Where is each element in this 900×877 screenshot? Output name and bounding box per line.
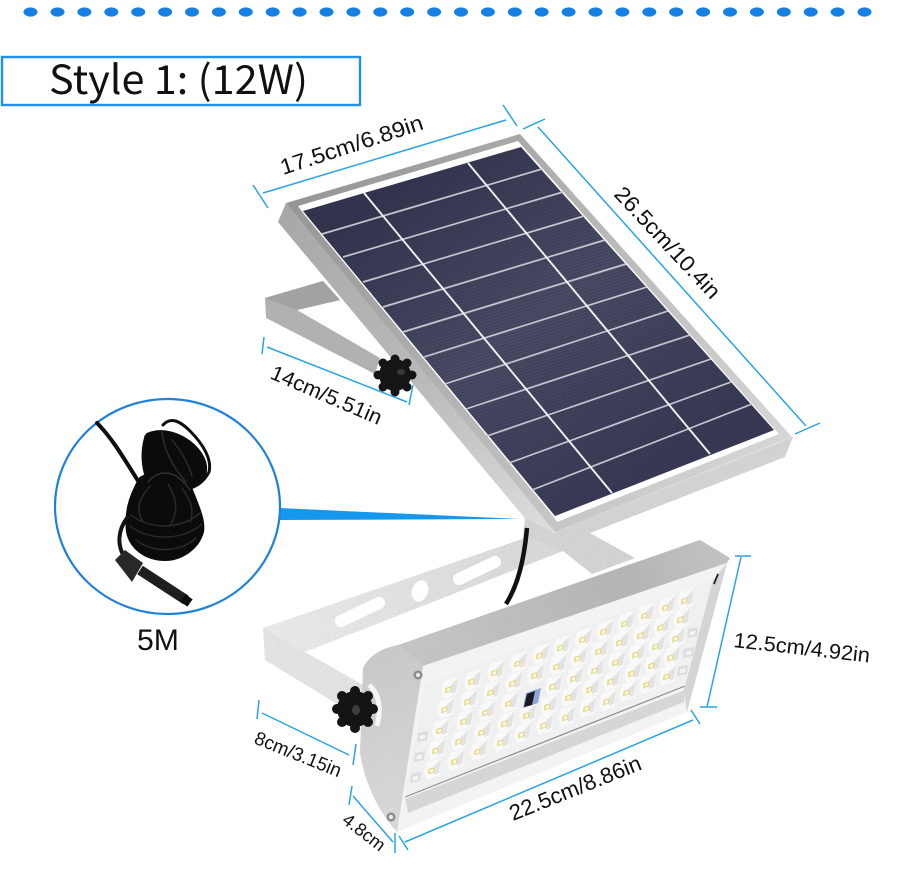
panel frame top surface: [286, 134, 792, 532]
label: lamp width: 22.5cm/8.86in: [506, 750, 645, 826]
strip shadow line: [405, 686, 685, 797]
title box: Style 1 (12W): Style 1: (12W): [49, 48, 308, 106]
label: lamp height: 12.5cm/4.92in: [732, 629, 871, 667]
horizontal cell lines: [322, 169, 752, 490]
power cable: [506, 528, 527, 604]
lamp side plate: [360, 645, 423, 832]
label: rear bracket length: 14cm/5.51in: [267, 361, 385, 430]
label: panel length: 26.5cm/10.4in: [609, 181, 726, 304]
dimension: lamp height: [700, 556, 751, 707]
cable detail circle: [55, 399, 280, 614]
screws: [386, 670, 422, 822]
coiled black cable: [97, 420, 210, 560]
label: panel width: 17.5cm/6.89in: [277, 110, 426, 180]
vertical cell bus lines: [364, 163, 710, 493]
dotted top border: [24, 7, 872, 17]
LED board: [405, 580, 713, 795]
lamp top housing: [398, 540, 730, 666]
dimension: panel width: [253, 105, 517, 208]
LED flood light head: [360, 540, 730, 832]
callout wedge from cable circle to panel: [279, 508, 520, 520]
dimension: rear bracket: [262, 337, 413, 405]
right end cap edge: [684, 563, 727, 712]
panel white margin: [298, 141, 779, 522]
dimension: lamp thickness: [349, 786, 395, 853]
dimension lines: [253, 105, 820, 853]
dimension: lamp width: [399, 710, 700, 850]
dimension: lamp depth: [257, 700, 356, 765]
bracket back bar: [263, 537, 563, 652]
dimension: panel length: [523, 119, 820, 434]
motion sensor window: [523, 688, 541, 708]
cable length label: 5M: [137, 624, 179, 657]
solar panel: [278, 134, 793, 546]
lamp knob: [332, 685, 379, 733]
label: lamp depth: 8cm/3.15in: [251, 728, 344, 782]
label: lamp thickness: 4.8cm: [339, 809, 389, 855]
lamp front frame: [397, 563, 727, 832]
mounting slots: [341, 562, 495, 621]
solar cells: [303, 147, 774, 516]
panel frame left face: [278, 203, 556, 532]
waterproof plug: [115, 550, 190, 603]
rear tilt bracket of solar panel: [265, 281, 380, 374]
lower grey strip: [405, 690, 685, 813]
bracket side arm: [263, 628, 372, 712]
LED array: [410, 588, 698, 783]
panel frame bottom face: [555, 437, 793, 546]
cell ribbing texture: [303, 147, 774, 516]
title box: Style 1 (12W): [2, 48, 360, 106]
strut from panel to bracket: [520, 518, 635, 574]
panel knob: [374, 354, 416, 396]
mounting bracket with slots: [263, 518, 635, 712]
